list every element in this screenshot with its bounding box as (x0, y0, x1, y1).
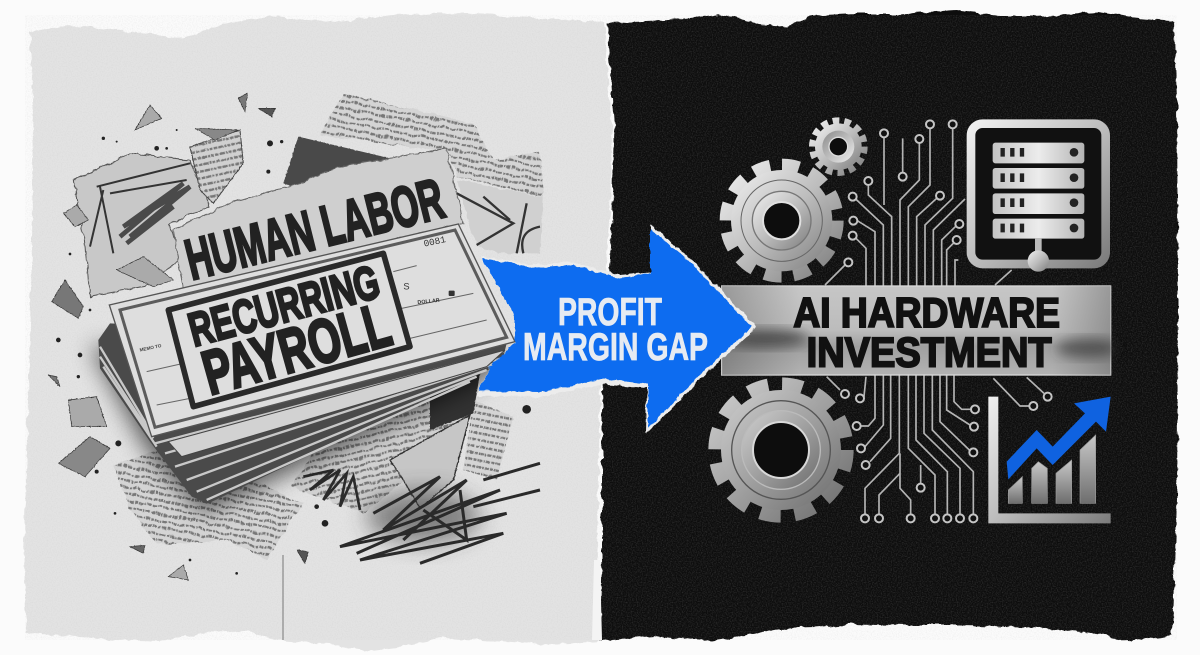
torn grey fragment (390, 415, 470, 508)
server connector (1028, 238, 1049, 272)
debris fragments (48, 93, 308, 580)
scribble: bottom right (340, 463, 540, 563)
chart trend arrow (1007, 397, 1111, 479)
sketch paper: upper right scribble (457, 180, 543, 253)
circuit traces (825, 120, 1052, 522)
arrow: profit margin gap (475, 224, 757, 434)
check stack sheets (98, 323, 507, 503)
server unit 2 (993, 168, 1084, 189)
stack shadow (90, 347, 510, 513)
check number: 0081 (423, 234, 447, 250)
illustration: payroll check stack (48, 93, 543, 580)
newspaper scrap: bottom left (113, 443, 303, 560)
icon: upper gear (726, 165, 838, 277)
dollar sign label: S (403, 281, 410, 291)
scribble smudge (367, 490, 480, 543)
scribble: centre fan (303, 470, 360, 510)
plate text: AI Hardware: AI HARDWARE (793, 289, 1060, 336)
server unit 4 (993, 219, 1084, 239)
label plate (722, 286, 1117, 376)
newspaper scrap: top right (320, 93, 543, 197)
icon: server rack (971, 124, 1106, 272)
illustration: AI hardware (715, 120, 1117, 523)
chart bars (1008, 435, 1096, 503)
top check (109, 224, 515, 437)
newspaper scrap: bottom centre (290, 390, 470, 513)
icon: padlock (449, 291, 455, 296)
arrow label: Margin Gap: MARGIN GAP (523, 326, 708, 369)
dark shadow scrap (430, 373, 480, 430)
newspaper scrap: bottom right (463, 400, 513, 480)
dark sheen right (1057, 339, 1117, 358)
circuit nodes (841, 120, 1052, 522)
plate text: Investment: INVESTMENT (807, 329, 1052, 376)
torn white divider strip (592, 560, 602, 640)
memo label: MEMO TO (139, 343, 162, 353)
newspaper scrap: left scribble sheet (73, 153, 210, 297)
growth chart (988, 397, 1111, 523)
icon: small gear (812, 121, 864, 173)
paper crease (282, 555, 284, 640)
dark photo corner (283, 137, 390, 190)
ink splatter (56, 129, 531, 575)
heading: Human Labor: HUMAN LABOR (179, 167, 450, 293)
arrow blue body (478, 228, 752, 428)
chart axes (988, 397, 1111, 523)
dollar word label: DOLLAR (417, 298, 440, 306)
torn scrap: upper centre (190, 130, 243, 203)
server unit 3 (993, 193, 1084, 214)
server unit 1 (993, 143, 1084, 163)
dark sheen left (723, 330, 810, 347)
panel: torn grey paper (24, 13, 612, 651)
torn header sheet (173, 148, 463, 290)
arrow torn white edge (475, 224, 757, 434)
stamp text: Recurring: RECURRING (183, 256, 385, 357)
stamp text: Payroll: PAYROLL (195, 290, 398, 408)
stamp border (168, 253, 410, 407)
panel: torn black paper (600, 10, 1178, 642)
arrow label: Profit: PROFIT (558, 291, 662, 334)
icon: lower gear (715, 384, 847, 516)
